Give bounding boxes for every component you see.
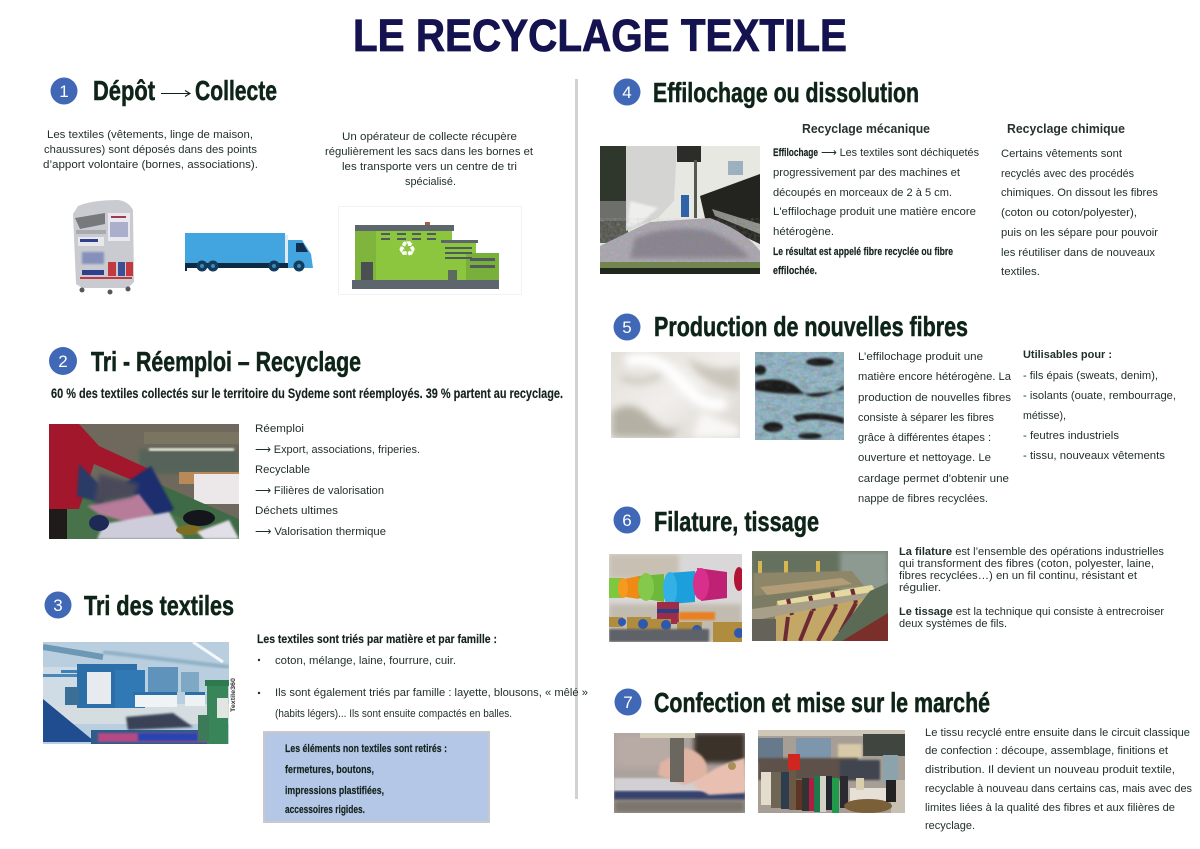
panel: step 2 sorting, reuse, recycling xyxy=(49,346,563,539)
panel: step 1 depot and collection xyxy=(43,75,534,294)
sorting criteria text: Ils sont également triés par famille : layette, blousons, « mêlé » xyxy=(275,687,588,699)
step number 7 xyxy=(614,688,642,716)
column: chemical recycling: chimiques. On dissout les fibres xyxy=(1001,187,1158,199)
photo: shredding machine xyxy=(600,146,760,274)
heading 4: Effilochage ou dissolution xyxy=(653,77,919,108)
list of streams xyxy=(255,423,420,538)
heading 3: Tri des textiles xyxy=(84,590,234,621)
step number 6: 6 xyxy=(622,511,632,530)
photo: sorting plant xyxy=(43,642,229,744)
panel: step 4 shredding or dissolution xyxy=(600,77,1158,278)
text: fibre production: consiste à séparer les fibres xyxy=(858,412,994,424)
text: uses: métisse), xyxy=(1023,410,1066,422)
photo: yarn cones xyxy=(609,554,742,642)
text: deposit xyxy=(43,129,258,171)
callout: non-textile elements: impressions plastifiées, xyxy=(285,785,384,797)
photo credit: Textile360 xyxy=(231,677,237,712)
text: collection: régulièrement les sacs dans les bornes et xyxy=(325,146,534,158)
step number 7: 7 xyxy=(623,693,633,712)
text: garment making: de confection : découpe, assemblage, finitions et xyxy=(925,745,1169,757)
photo: loom xyxy=(752,551,888,641)
column: mechanical recycling: L'effilochage produit une matière encore xyxy=(773,206,976,218)
column: chemical recycling: Recyclage chimique xyxy=(1007,122,1125,136)
step number 5: 5 xyxy=(622,318,632,337)
text: fibre production: cardage permet d'obtenir une xyxy=(858,473,1009,485)
text: uses: - feutres industriels xyxy=(1023,430,1119,442)
photo: sorting line workers xyxy=(49,424,239,539)
heading 1 xyxy=(93,75,277,106)
sorting criteria text xyxy=(257,632,588,720)
text: fibre production: matière encore hétérogène. La xyxy=(858,371,1012,383)
list of streams: ⟶ Filières de valorisation xyxy=(255,485,384,497)
text: fibre production: ouverture et nettoyage. Le xyxy=(858,452,991,464)
panel: step 6 spinning and weaving xyxy=(609,506,1164,642)
column: mechanical recycling: hétérogène. xyxy=(773,226,834,238)
photo: white fibres xyxy=(611,352,740,438)
callout: non-textile elements: accessoires rigides. xyxy=(285,804,365,816)
text: fibre production: L’effilochage produit une xyxy=(858,351,983,363)
sorting criteria text: coton, mélange, laine, fourrure, cuir. xyxy=(275,655,456,667)
panel: step 7 garment making and market xyxy=(614,687,1192,832)
text: deposit: Les textiles (vêtements, linge de maison, xyxy=(47,129,253,141)
heading 1: Dépôt xyxy=(93,75,155,106)
heading 1: Collecte xyxy=(195,75,277,106)
column: chemical recycling xyxy=(1001,122,1158,278)
text: fibre production: grâce à différentes étapes : xyxy=(858,432,991,444)
sorting criteria text: Les textiles sont triés par matière et par famille : xyxy=(257,632,497,646)
text: fibre production: production de nouvelles fibres xyxy=(858,392,1011,404)
icon: truck xyxy=(185,233,313,272)
step number 5 xyxy=(614,314,640,340)
column: chemical recycling: textiles. xyxy=(1001,266,1040,278)
photo: recycled fibre mat xyxy=(755,352,844,440)
step number 1: 1 xyxy=(59,82,69,101)
text: spinning and weaving: La filature est l’ensemble des opérations industrielles xyxy=(899,546,1164,558)
key figures: 60 % des textiles collectés sur le territoire du Sydeme sont réemployés. 39 % partent au recyclage. xyxy=(51,386,563,401)
text: spinning and weaving: deux systèmes de fils. xyxy=(899,618,1007,630)
step number 1 xyxy=(50,78,78,104)
text: uses: - tissu, nouveaux vêtements xyxy=(1023,450,1165,462)
icon: recycling factory xyxy=(338,206,522,294)
text: collection: Un opérateur de collecte récupère xyxy=(342,131,517,143)
text: garment making: recyclable à nouveau dans certains cas, mais avec des xyxy=(925,783,1192,795)
text: deposit: d’apport volontaire (bornes, associations). xyxy=(43,159,258,171)
heading 5: Production de nouvelles fibres xyxy=(654,311,968,342)
text: uses xyxy=(1023,349,1176,462)
step number 2 xyxy=(49,347,77,375)
heading 6: Filature, tissage xyxy=(654,506,819,537)
column: chemical recycling: les réutiliser dans de nouveaux xyxy=(1001,247,1155,259)
text: spinning and weaving: qui transforment des fibres (coton, polyester, laine, xyxy=(899,558,1154,570)
text: garment making xyxy=(925,727,1192,832)
column: mechanical recycling xyxy=(773,122,979,277)
column: mechanical recycling: effilochée. xyxy=(773,265,817,277)
step number 3 xyxy=(44,592,72,618)
text: spinning and weaving: fibres recyclées…) en un fil continu, résistant et xyxy=(899,570,1138,582)
step number 2: 2 xyxy=(58,352,68,371)
column: mechanical recycling: progressivement par des machines et xyxy=(773,167,961,179)
column: chemical recycling: puis on les sépare pour pouvoir xyxy=(1001,227,1158,239)
photo: sewing machine xyxy=(614,733,745,813)
column: mechanical recycling: Recyclage mécanique xyxy=(802,122,930,136)
callout: non-textile elements: Les éléments non textiles sont retirés : xyxy=(285,743,447,755)
text: garment making: Le tissu recyclé entre ensuite dans le circuit classique xyxy=(925,727,1190,739)
text: uses: - isolants (ouate, rembourrage, xyxy=(1023,390,1176,402)
text: fibre production xyxy=(858,351,1012,505)
icon: collection bin xyxy=(73,200,134,294)
text: deposit: chaussures) sont déposés dans des points xyxy=(44,144,257,156)
icon: recycling factory: ♻ xyxy=(398,237,416,261)
step number 4: 4 xyxy=(622,83,632,102)
text: garment making: distribution. Il devient un nouveau produit textile, xyxy=(925,764,1175,776)
list of streams: ⟶ Valorisation thermique xyxy=(255,526,386,538)
text: spinning and weaving xyxy=(899,546,1164,630)
vertical divider between columns xyxy=(575,79,578,799)
step number 6 xyxy=(614,506,640,534)
list of streams: ⟶ Export, associations, friperies. xyxy=(255,444,420,456)
sorting criteria text: (habits légers)... Ils sont ensuite compactés en balles. xyxy=(275,708,512,720)
text: garment making: limites liées à la qualité des fibres et aux filières de xyxy=(925,802,1175,814)
list of streams: Recyclable xyxy=(255,464,310,476)
column: chemical recycling: Certains vêtements sont xyxy=(1001,148,1123,160)
list of streams: Réemploi xyxy=(255,423,304,435)
callout: non-textile elements xyxy=(264,732,489,822)
text: spinning and weaving: Le tissage est la technique qui consiste à entrecroiser xyxy=(899,606,1164,618)
heading 7: Confection et mise sur le marché xyxy=(654,687,990,718)
text: garment making: recyclage. xyxy=(925,820,975,832)
text: spinning and weaving: régulier. xyxy=(899,582,941,594)
column: mechanical recycling: découpés en morceaux de 2 à 5 cm. xyxy=(773,187,952,199)
photo: clothing shop xyxy=(758,730,905,813)
text: uses: Utilisables pour : xyxy=(1023,349,1112,361)
list of streams: Déchets ultimes xyxy=(255,505,338,517)
step number 3: 3 xyxy=(53,596,63,615)
title: LE RECYCLAGE TEXTILE xyxy=(353,10,847,61)
text: collection xyxy=(325,131,534,188)
panel: step 5 new fibres xyxy=(611,311,1176,505)
step number 4 xyxy=(614,78,640,106)
column: mechanical recycling: Le résultat est appelé fibre recyclée ou fibre xyxy=(773,246,953,258)
column: chemical recycling: (coton ou coton/polyester), xyxy=(1001,207,1137,219)
column: mechanical recycling: ⟶ Les textiles sont déchiquetés xyxy=(821,147,979,159)
text: fibre production: nappe de fibres recyclées. xyxy=(858,493,988,505)
heading 2: Tri - Réemploi – Recyclage xyxy=(91,346,361,377)
panel: step 3 textile sorting xyxy=(43,590,588,822)
callout: non-textile elements: fermetures, boutons, xyxy=(285,764,374,776)
text: collection: spécialisé. xyxy=(405,176,456,188)
text: uses: - fils épais (sweats, denim), xyxy=(1023,370,1158,382)
column: chemical recycling: recyclés avec des procédés xyxy=(1001,168,1134,180)
text: collection: les transporte vers un centre de tri xyxy=(342,161,517,173)
column: mechanical recycling: Effilochage xyxy=(773,147,818,159)
